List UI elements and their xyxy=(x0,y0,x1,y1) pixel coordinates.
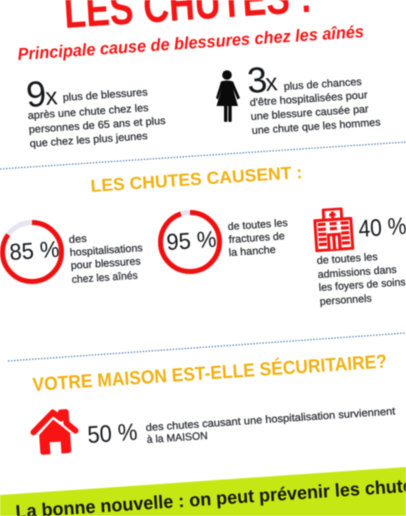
text: 85 % description: des xyxy=(68,233,87,246)
text: 40 % description: les foyers de soins xyxy=(318,276,406,294)
text: 50 % description xyxy=(145,405,396,446)
stat: 9x injuries: plus de blessures xyxy=(62,86,148,104)
icon: woman xyxy=(216,70,240,122)
stat: 50 %: 50 % xyxy=(87,419,138,449)
stat: 3x hospitalised: une blessure causée par xyxy=(250,103,369,123)
icon: house xyxy=(32,411,77,455)
text: 85 % description: hospitalisations xyxy=(69,242,143,259)
text: 95 % description: la hanche xyxy=(228,244,276,259)
text: 85 % description: chez les aînés xyxy=(71,270,138,286)
donut: 85 % xyxy=(2,222,62,282)
text: 40 % description: personnels xyxy=(319,293,372,308)
donut: 85 %: 85 % xyxy=(9,236,60,265)
text: 95 % description xyxy=(227,217,288,259)
stat: 9x injuries xyxy=(25,73,166,150)
stat: 3x hospitalised xyxy=(246,59,381,137)
stat: 9x injuries: personnes de 65 ans et plus xyxy=(28,115,166,136)
donut: 95 %: 95 % xyxy=(166,226,217,255)
text: 40 % description xyxy=(316,251,406,308)
stat: 3x hospitalised: x xyxy=(265,69,278,97)
icon: hospital xyxy=(313,207,354,252)
stat: 9x injuries: après une chute chez les xyxy=(27,102,149,122)
stat: 9x injuries: que chez les plus jeunes xyxy=(29,130,148,150)
text: 50 % description: à la MAISON xyxy=(146,430,208,446)
stat: 3x hospitalised: une chute que les hommes xyxy=(251,116,381,137)
stat: 3x hospitalised: 3 xyxy=(246,59,269,101)
text: 95 % description: de toutes les xyxy=(227,217,288,233)
text: 85 % description xyxy=(68,233,143,286)
text: 40 % description: admissions dans xyxy=(317,264,397,281)
text: 50 % description: des chutes causant une hospitalisation surviennent xyxy=(145,405,396,434)
stat: 3x hospitalised: d'être hospitalisées pour xyxy=(249,89,368,109)
subtitle: Principale cause de blessures chez les aînés xyxy=(17,22,365,64)
text: 85 % description: pour blessures xyxy=(70,255,141,272)
text: 40 % description: de toutes les xyxy=(316,251,378,267)
stat: 9x injuries: x xyxy=(45,83,58,111)
text: 95 % description: fractures de xyxy=(228,230,285,246)
stat: 9x injuries: 9 xyxy=(25,73,48,115)
donut: 95 % xyxy=(160,212,220,272)
stat: 3x hospitalised: plus de chances xyxy=(283,76,362,93)
heading: les chutes causent: LES CHUTES CAUSENT : xyxy=(90,162,303,196)
